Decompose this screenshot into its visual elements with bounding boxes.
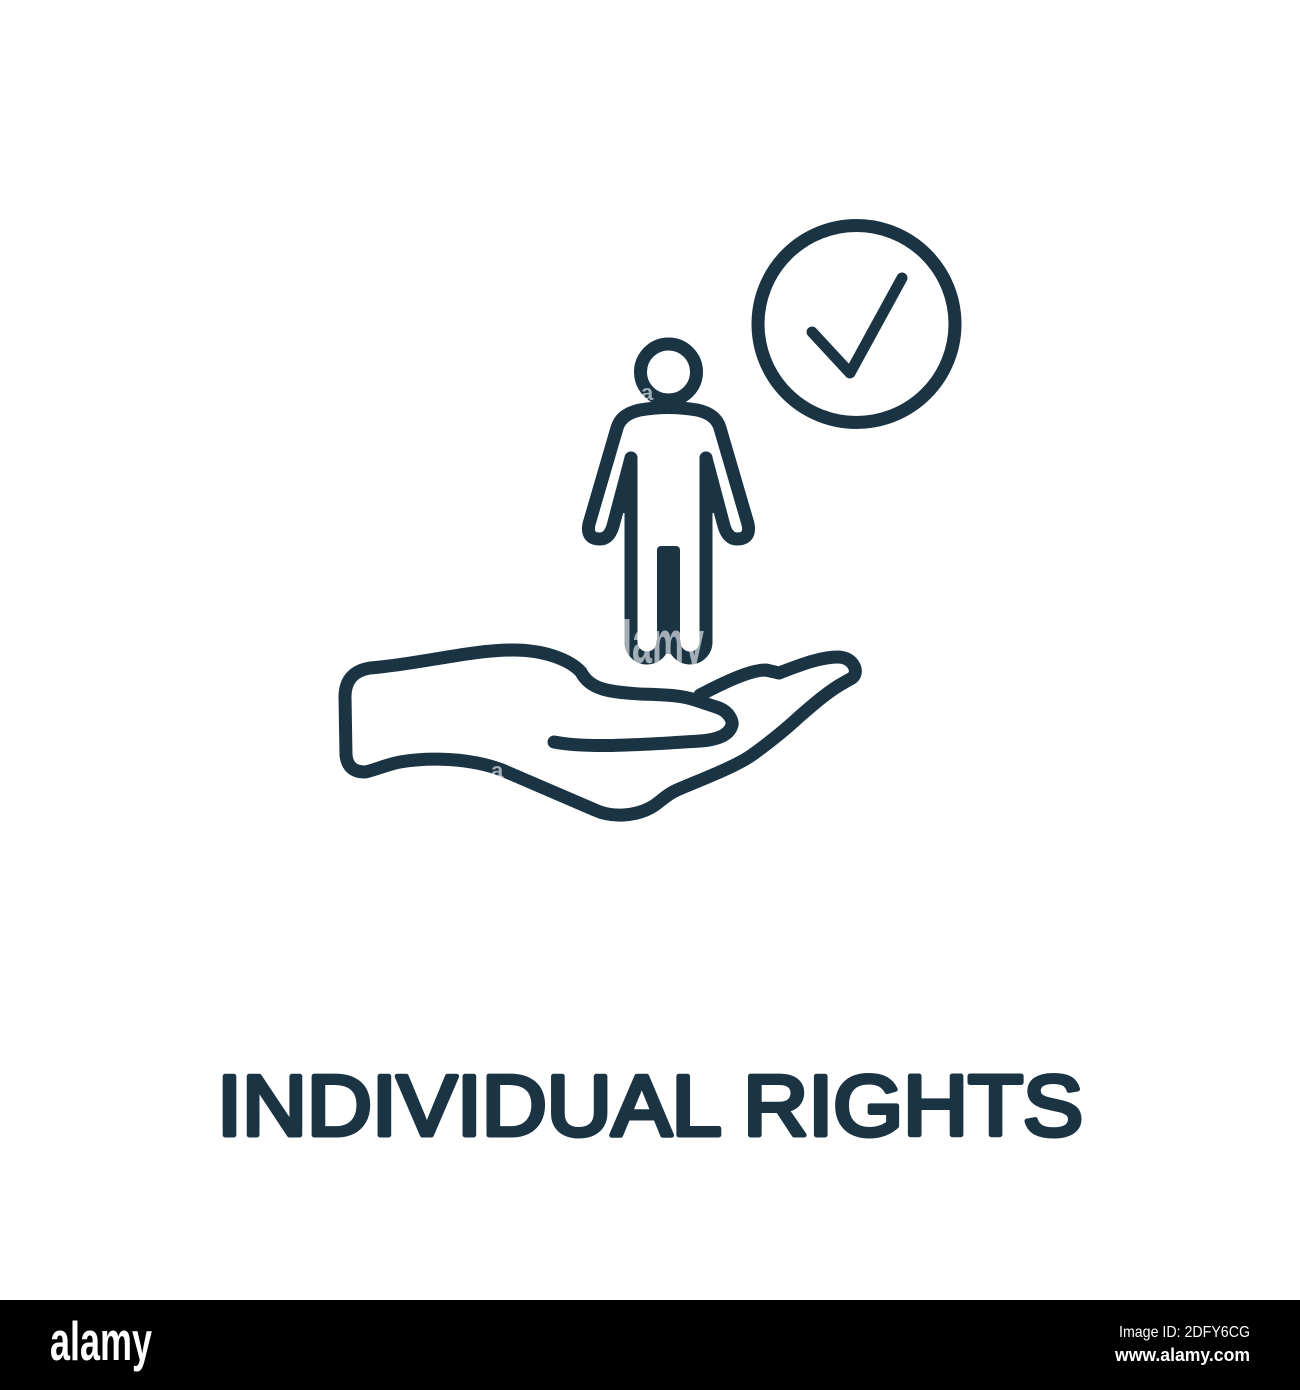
footer bar <box>0 1300 1300 1390</box>
logo: alamy: alamy <box>50 1310 152 1372</box>
title: INDIVIDUAL RIGHTS <box>217 1059 1083 1154</box>
image id: Image ID: 2DFY6CG <box>1119 1324 1250 1341</box>
icon: open hand <box>345 650 855 815</box>
watermark traces on icon <box>491 380 704 783</box>
icon: individual rights <box>345 226 955 815</box>
watermark traces on icon: a <box>491 758 504 783</box>
icon: person <box>588 344 749 658</box>
website: www.alamy.com <box>1114 1345 1250 1365</box>
watermark traces on icon: a <box>641 380 654 405</box>
watermark traces on icon: lamy <box>622 609 704 676</box>
icon: check mark badge <box>758 226 955 422</box>
